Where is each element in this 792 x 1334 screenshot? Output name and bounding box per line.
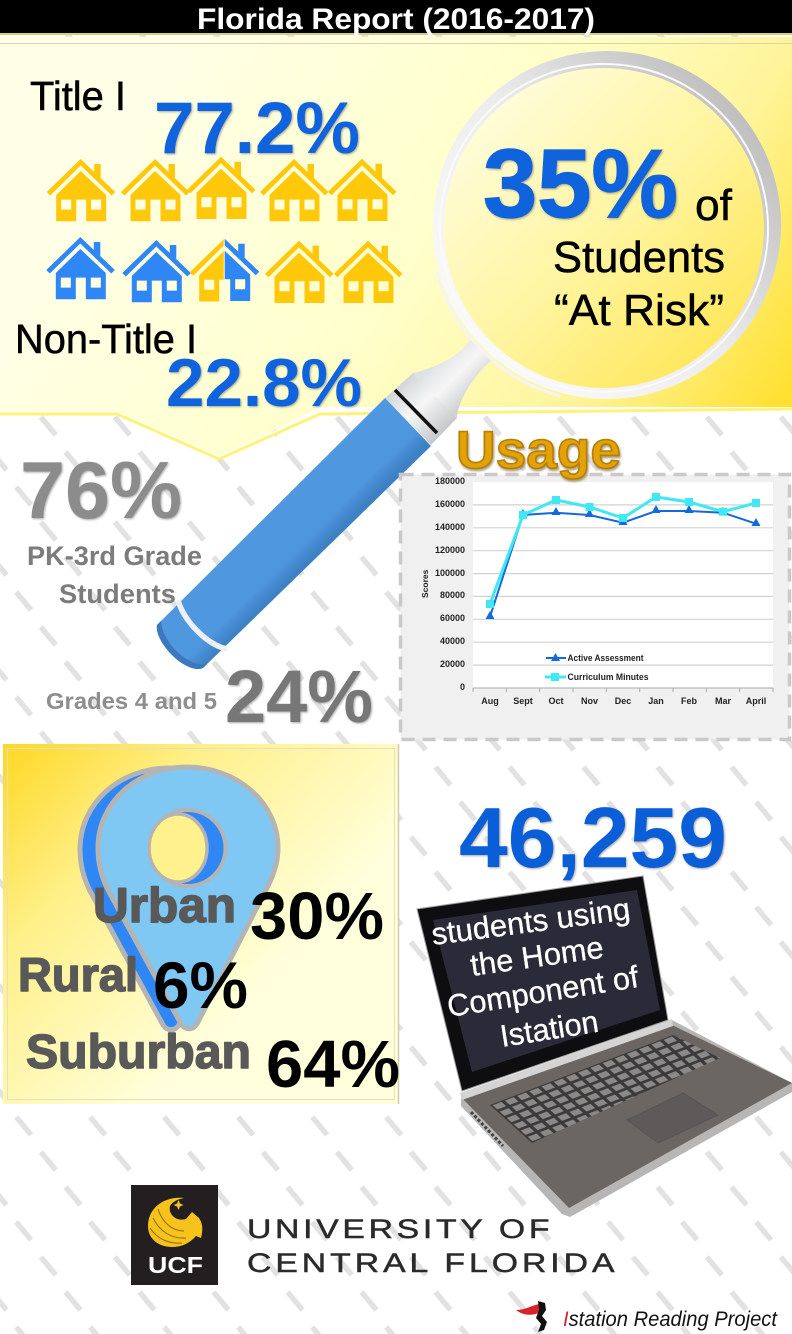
hinge <box>460 1019 673 1100</box>
icon: map pin <box>80 767 278 1030</box>
At Risk: “At Risk” <box>554 286 724 335</box>
Suburban value: 64% <box>266 1027 400 1102</box>
icon: row of Non-Title I and Title I houses <box>46 237 403 303</box>
y axis labels: 160000 <box>435 499 465 509</box>
title bar <box>0 0 792 36</box>
x axis labels: Mar <box>715 696 731 706</box>
Students: Students <box>553 233 725 282</box>
y axis labels: 120000 <box>435 545 465 555</box>
university name: CENTRAL FLORIDA <box>247 1248 615 1278</box>
icon: row of Title I houses <box>47 157 396 221</box>
x axis labels <box>481 696 766 706</box>
y axis labels: 80000 <box>440 590 465 600</box>
callout: at risk <box>483 129 733 335</box>
x axis labels: Dec <box>615 696 631 706</box>
Title I label: Title I <box>30 73 126 119</box>
footer: Istation Reading Project: Istation Reading Project <box>563 1308 778 1331</box>
legend <box>545 653 648 682</box>
76 percent: 76% <box>20 446 182 536</box>
laptop screen <box>417 876 668 1091</box>
title: Florida Report (2016-2017) <box>197 3 595 36</box>
y axis labels: 40000 <box>440 636 465 646</box>
icon: Istation hero <box>516 1301 547 1332</box>
UCF logo <box>131 1185 218 1285</box>
keyboard <box>490 1035 720 1143</box>
university name: UNIVERSITY OF <box>247 1214 550 1244</box>
Students label: Students <box>59 579 176 609</box>
screen text: the Home <box>468 930 606 983</box>
Non-Title I label: Non-Title I <box>15 316 197 362</box>
Rural label: Rural <box>18 948 138 1001</box>
y axis labels: 180000 <box>435 476 465 486</box>
UCF wordmark: UCF <box>148 1252 203 1278</box>
screen text: students using <box>429 891 632 952</box>
series: Active Assessment <box>486 505 760 619</box>
24 percent: 24% <box>225 655 373 738</box>
Rural value: 6% <box>153 948 248 1022</box>
of: of <box>695 181 733 230</box>
Title I percentage: 77.2% <box>154 88 360 169</box>
plot area <box>473 482 773 688</box>
panel: usage chart <box>400 474 790 740</box>
Suburban label: Suburban <box>26 1026 251 1079</box>
student count: 46,259 <box>459 791 727 886</box>
touchpad <box>627 1093 718 1143</box>
PK-3rd Grade: PK-3rd Grade <box>27 541 202 571</box>
x axis labels: Sept <box>513 696 533 706</box>
Urban label: Urban <box>93 879 236 933</box>
panel: school type <box>0 37 792 459</box>
series: Curriculum Minutes <box>486 493 760 608</box>
Non-Title I percentage: 22.8% <box>166 345 362 421</box>
x axis labels: April <box>746 696 766 706</box>
legend: Active Assessment <box>568 653 644 663</box>
y axis labels: 60000 <box>440 613 465 623</box>
heading: Usage: Usage <box>456 421 621 480</box>
university name <box>247 1214 615 1278</box>
y axis labels: 100000 <box>435 568 465 578</box>
Urban value: 30% <box>250 879 384 954</box>
35 percent: 35% <box>483 129 678 238</box>
grade split <box>20 446 373 738</box>
x axis labels: Oct <box>548 696 564 706</box>
laptop base <box>461 1020 792 1217</box>
screen text <box>429 891 641 1054</box>
panel: locale <box>3 744 400 1104</box>
x axis labels: Feb <box>681 696 697 706</box>
x axis labels: Jan <box>648 696 664 706</box>
icon: magnifying glass <box>157 51 781 669</box>
y axis title: Scores <box>420 569 430 598</box>
icon: pegasus <box>148 1198 202 1247</box>
legend: Curriculum Minutes <box>568 672 648 682</box>
y axis labels <box>435 476 465 692</box>
x axis labels: Nov <box>581 696 598 706</box>
y axis labels: 20000 <box>440 659 465 669</box>
screen text: Istation <box>498 1004 601 1054</box>
screen text: Component of <box>445 959 641 1024</box>
Grades 4 and 5: Grades 4 and 5 <box>46 688 217 714</box>
x axis labels: Aug <box>481 696 499 706</box>
y axis labels: 140000 <box>435 522 465 532</box>
y axis labels: 0 <box>460 682 465 692</box>
icon: laptop <box>417 876 792 1217</box>
